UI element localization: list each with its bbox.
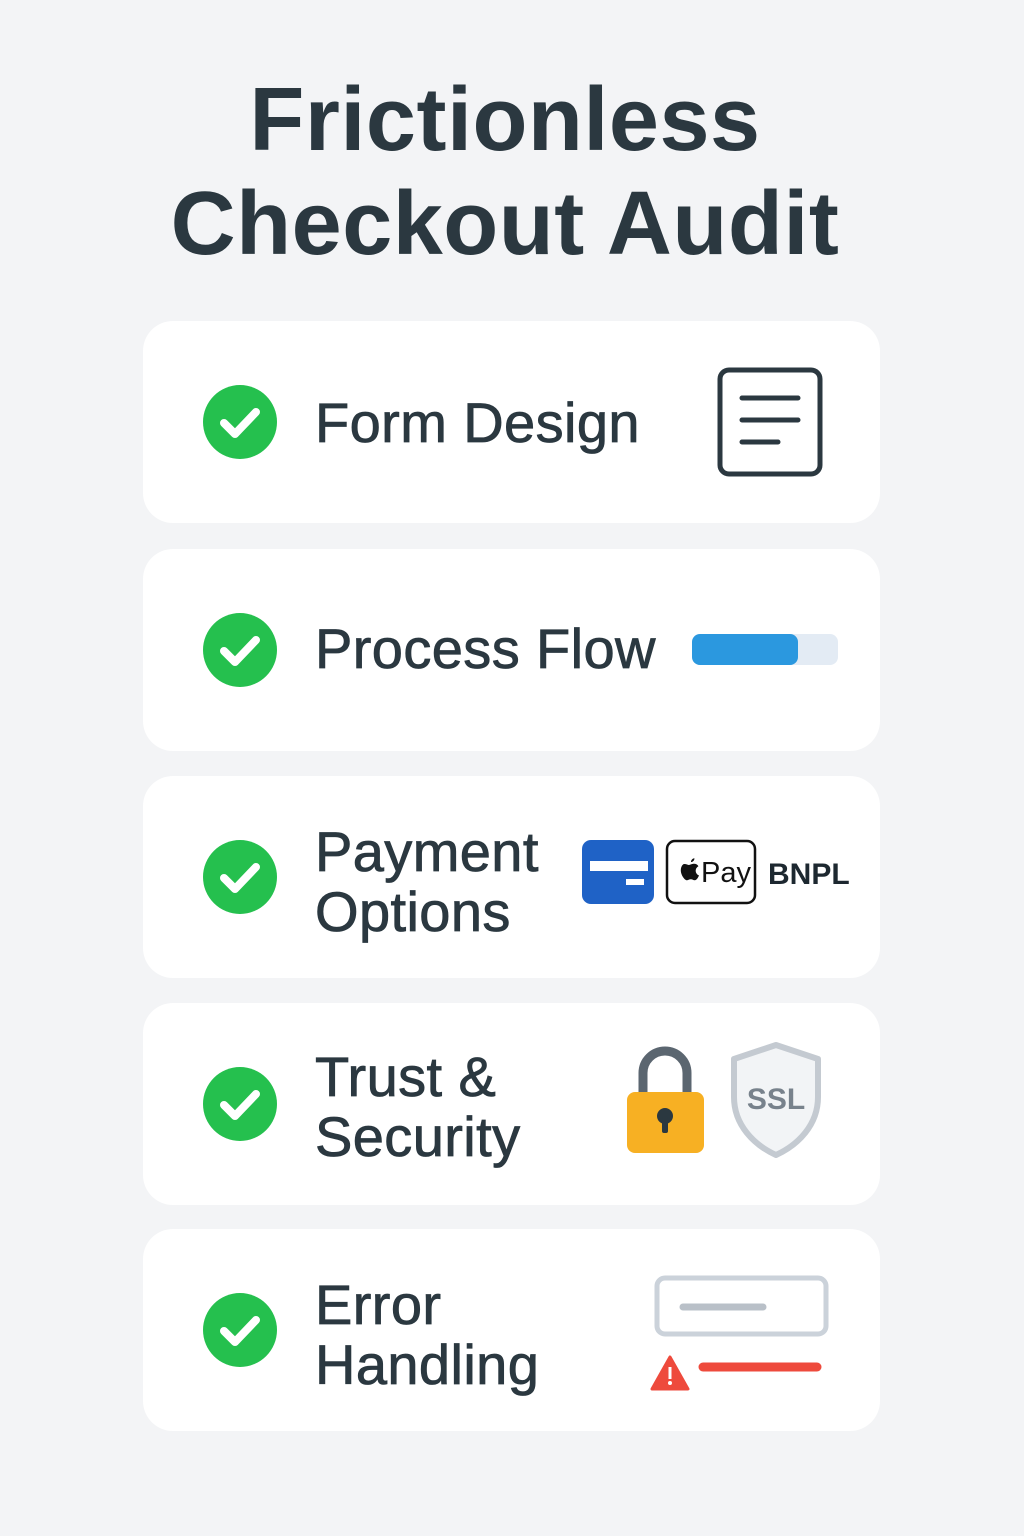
icon: check <box>203 1293 277 1367</box>
icon: check <box>203 840 277 914</box>
icon: check <box>203 1067 277 1141</box>
icon: progress bar <box>692 634 838 665</box>
label: Form Design <box>315 391 640 454</box>
label: Handling <box>315 1333 539 1396</box>
label <box>315 1273 539 1396</box>
icon: padlock <box>627 1046 704 1153</box>
label: Trust & <box>315 1045 496 1108</box>
icon: error input <box>650 1276 828 1390</box>
title: Checkout Audit <box>171 174 839 274</box>
panel: payment options <box>143 776 880 978</box>
title <box>171 70 839 274</box>
label: Error <box>315 1273 441 1336</box>
icon: payment methods: Pay <box>701 857 751 889</box>
label: Process Flow <box>315 617 656 680</box>
label <box>315 1045 521 1168</box>
label: Options <box>315 880 511 943</box>
icon: check <box>203 385 277 459</box>
icon: payment methods <box>582 840 850 904</box>
label: Security <box>315 1105 520 1168</box>
label: Payment <box>315 820 539 883</box>
panel: process flow <box>143 549 880 751</box>
label <box>315 820 539 943</box>
icon: check <box>203 613 277 687</box>
panel: error handling <box>143 1229 880 1431</box>
panel: form design <box>143 321 880 523</box>
panel: trust & security <box>143 1003 880 1205</box>
icon: SSL shield: SSL <box>747 1083 805 1116</box>
icon: SSL shield <box>731 1042 821 1158</box>
title: Frictionless <box>249 70 761 170</box>
icon: form document <box>718 368 822 476</box>
icon: payment methods: BNPL <box>768 858 850 891</box>
